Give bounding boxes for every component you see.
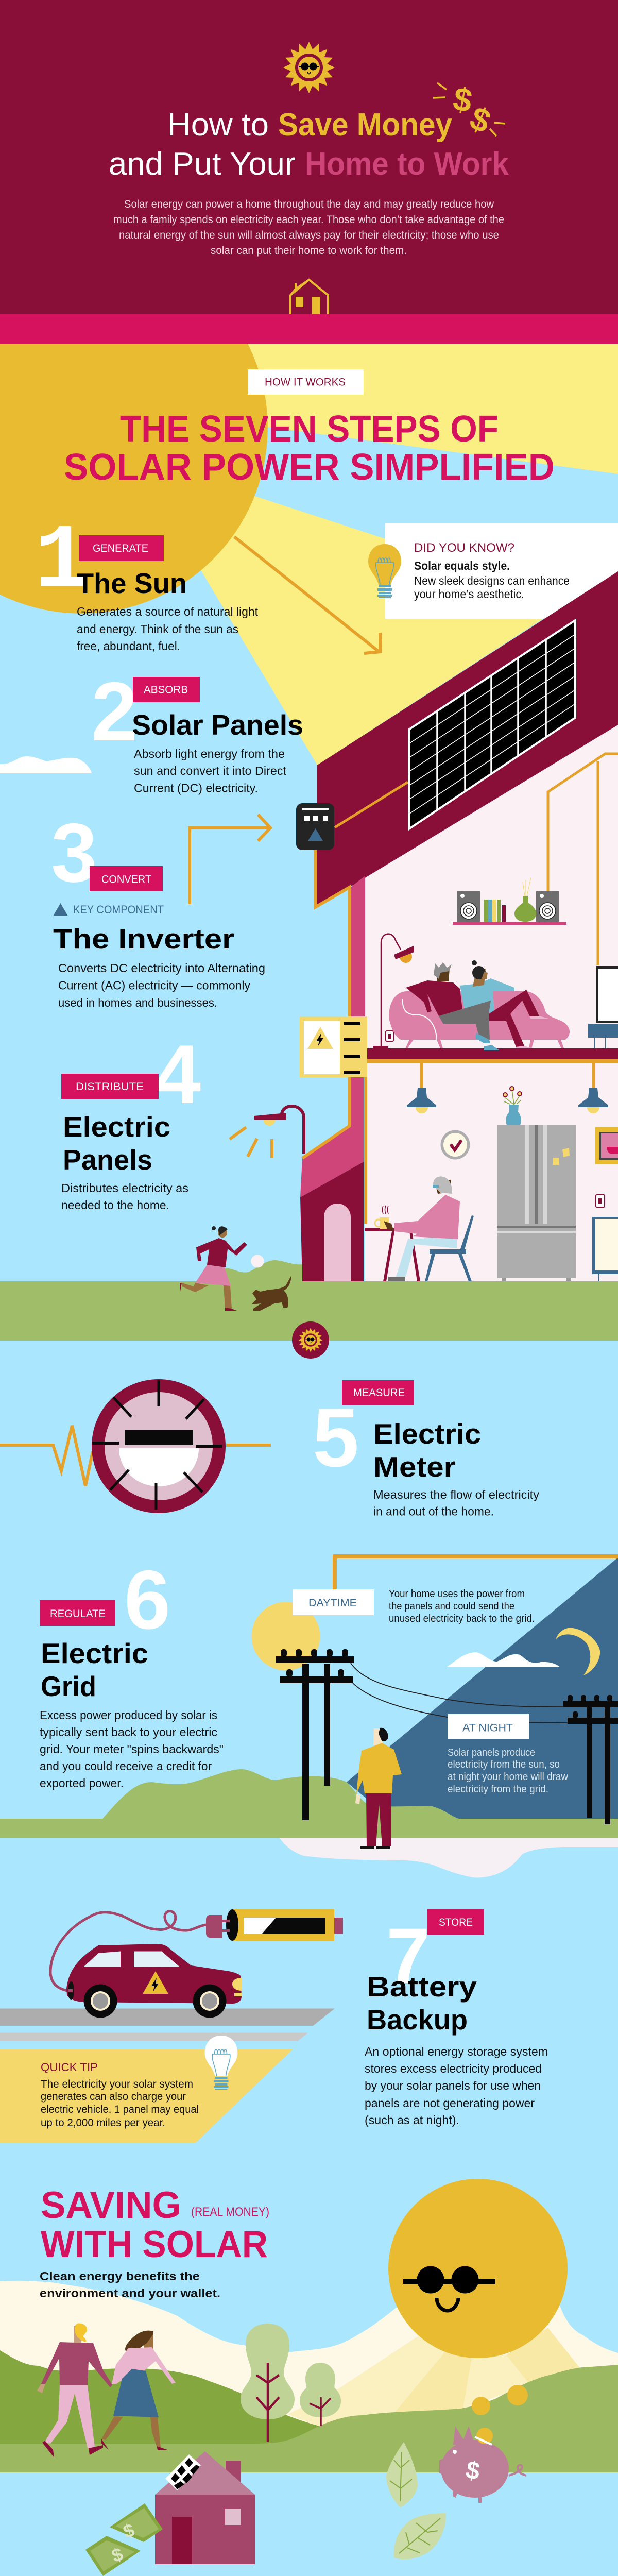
subtitle: Clean energy benefits the (40, 2269, 200, 2283)
background: sun rays (196, 344, 618, 765)
sticker: convert: CONVERT (101, 874, 151, 885)
tip text: The electricity your solar system (41, 2078, 193, 2090)
sticker: regulate (40, 1600, 115, 1626)
wire: daytime orange (335, 1556, 618, 1589)
icon: white bulb (205, 2036, 238, 2090)
number 1: 1 (35, 511, 90, 614)
tip text: up to 2,000 miles per year. (41, 2117, 165, 2129)
house: lower wall shape (300, 1077, 367, 1282)
callout text: your home’s aesthetic. (414, 587, 524, 601)
sofa (389, 991, 570, 1048)
house: side wall column (351, 876, 365, 1018)
tip text: electric vehicle. 1 panel may equal (41, 2104, 199, 2115)
body text (365, 2045, 548, 2127)
number 6: 6 (124, 1553, 170, 1647)
title (41, 2184, 269, 2265)
number 2: 2 (91, 665, 138, 758)
body text: Measures the flow of electricity (373, 1488, 540, 1501)
icon: dollar bills near house (85, 2503, 163, 2576)
panel: step 2 solar panels (91, 665, 303, 794)
icon: electric panel (300, 1016, 367, 1077)
icon: electric meter (0, 1379, 271, 1513)
callout: daytime: the panels and could send the (389, 1601, 514, 1612)
road (0, 2008, 335, 2041)
panel: step 5 electric meter (313, 1380, 540, 1518)
trees (241, 2324, 341, 2442)
floor (367, 1048, 618, 1063)
woman on sofa (460, 960, 548, 1048)
heading: Electric (41, 1637, 148, 1669)
desk with screen (592, 1217, 618, 1281)
vase with flowers (503, 1087, 522, 1125)
sticker: store: STORE (439, 1917, 473, 1928)
big sun (0, 344, 268, 614)
icon: smiling sun (283, 42, 335, 93)
sticker: absorb: ABSORB (144, 684, 188, 696)
callout: daytime: unused electricity back to the grid. (389, 1613, 535, 1624)
heading: Backup (367, 2004, 468, 2036)
house: wall (365, 725, 618, 1282)
utility poles with wires (276, 1649, 618, 1824)
body text (40, 1708, 224, 1790)
woman (101, 2331, 176, 2450)
body text: typically sent back to your electric (40, 1725, 217, 1739)
ball (251, 1255, 264, 1267)
callout: at night: AT NIGHT (462, 1722, 513, 1734)
body text: Excess power produced by solar is (40, 1708, 217, 1722)
icon: leaves (386, 2442, 446, 2559)
body text: by your solar panels for use when (365, 2079, 541, 2092)
icon: dollar signs: $ (465, 99, 496, 140)
number 4: 4 (154, 1028, 201, 1121)
chair (425, 1215, 474, 1281)
title: How to (167, 107, 269, 143)
seated woman with table (365, 1176, 474, 1281)
man on sofa (406, 962, 500, 1050)
intro text (113, 198, 504, 257)
coins (472, 2385, 528, 2415)
subtitle: environment and your wallet. (40, 2286, 220, 2300)
heading (367, 1971, 477, 2036)
solar panels array (409, 620, 575, 829)
icon: piggy bank (439, 2426, 526, 2503)
callout text: Solar equals style. (414, 559, 510, 572)
tip text (41, 2061, 199, 2129)
grass band (0, 1260, 618, 1341)
body text: An optional energy storage system (365, 2045, 548, 2058)
body text (58, 961, 265, 1009)
callout text: New sleek designs can enhance (414, 574, 570, 587)
icon: dollar signs (433, 80, 505, 140)
panel: step 1 the sun (35, 511, 259, 653)
body text: Current (AC) electricity — commonly (58, 979, 250, 992)
outdoor lamp (230, 1106, 304, 1158)
panel: saving heading (40, 2184, 269, 2300)
floor lamp (373, 934, 414, 1048)
callout: at night: Solar panels produce (448, 1747, 535, 1758)
intro text: solar can put their home to work for them. (211, 245, 407, 257)
body text (134, 747, 287, 794)
callout text: DID YOU KNOW? (414, 541, 514, 555)
body text (373, 1488, 540, 1518)
heading (63, 1111, 170, 1176)
callout: at night: at night your home will draw (448, 1771, 569, 1783)
title: Save Money (278, 107, 452, 143)
panel: header (0, 0, 618, 314)
icon: house (290, 280, 328, 314)
heading: Meter (373, 1451, 456, 1483)
body text: needed to the home. (61, 1198, 169, 1212)
TV with stand (588, 966, 618, 1048)
panel: step 6 electric grid (40, 1553, 224, 1790)
heading (373, 1418, 481, 1483)
body text: and energy. Think of the sun as (77, 622, 238, 636)
icon: yellow bulb (368, 544, 401, 598)
body text: exported power. (40, 1776, 124, 1790)
callout: daytime: Your home uses the power from (389, 1588, 525, 1600)
panel: step 7 battery backup (365, 1909, 548, 2127)
picture frame (595, 1127, 618, 1164)
sticker: absorb (133, 677, 200, 702)
body text: sun and convert it into Direct (134, 764, 287, 777)
wires: orange wiring (315, 754, 618, 1018)
people on sofa (406, 960, 548, 1050)
heading: seven steps: THE SEVEN STEPS OF (120, 409, 499, 450)
callout: daytime (293, 1588, 535, 1624)
body text: used in homes and businesses. (58, 996, 217, 1009)
number 5: 5 (313, 1391, 359, 1484)
fridge (497, 1125, 576, 1281)
tip text: QUICK TIP (41, 2061, 98, 2074)
body text: Absorb light energy from the (134, 747, 285, 760)
body text: Converts DC electricity into Alternating (58, 961, 265, 975)
title: and Put Your (109, 146, 296, 182)
heading: The Inverter (53, 923, 234, 955)
title: Home to Work (305, 146, 509, 182)
icon: dollar bills near house: $ (121, 2519, 137, 2543)
intro text: Solar energy can power a home throughout the day and may greatly reduce how (124, 198, 494, 210)
intro text: much a family spends on electricity each year. Those who don’t take advantage of the (113, 214, 504, 226)
saving scene: landscape (0, 2281, 618, 2472)
body text (77, 605, 259, 653)
number 7: 7 (386, 1912, 430, 2000)
body text: panels are not generating power (365, 2096, 535, 2110)
arrow: sun to panels (234, 537, 381, 653)
running child (180, 1226, 247, 1311)
body text (61, 1181, 188, 1212)
title: (REAL MONEY) (191, 2205, 269, 2219)
heading: Grid (41, 1670, 96, 1702)
icon: inverter (296, 803, 334, 850)
outlet (386, 1031, 393, 1041)
sticker: how it works: HOW IT WORKS (265, 376, 346, 388)
house: roof (317, 571, 618, 907)
body text: Generates a source of natural light (77, 605, 259, 618)
sticker: generate (79, 535, 164, 561)
panel: did you know (368, 523, 618, 619)
cloud (447, 1652, 560, 1667)
badge: sun (292, 1321, 329, 1359)
icon: battery with plug (206, 1909, 343, 1941)
cloud (0, 756, 92, 773)
callout: at night: electricity from the sun, so (448, 1759, 560, 1770)
callout: daytime: DAYTIME (308, 1597, 357, 1609)
path: light road (280, 1838, 618, 1877)
sticker: measure (342, 1380, 414, 1405)
callout text (414, 541, 570, 601)
body text: in and out of the home. (373, 1504, 494, 1518)
heading (41, 1637, 148, 1702)
sticker: measure: MEASURE (353, 1387, 405, 1399)
key component: KEY COMPONENT (73, 903, 164, 916)
title: WITH SOLAR (41, 2224, 268, 2265)
body text: and you could receive a credit for (40, 1759, 212, 1773)
sticker: convert (90, 866, 163, 891)
tip text: generates can also charge your (41, 2091, 186, 2103)
sticker: how it works (248, 369, 364, 395)
icon: electric car (50, 1911, 242, 2018)
dog (251, 1275, 291, 1311)
heading: Electric (373, 1418, 481, 1450)
night sky (347, 1557, 618, 1819)
callout: at night: electricity from the grid. (448, 1784, 548, 1795)
number 3: 3 (51, 806, 97, 900)
man looking up (355, 1728, 402, 1849)
body text: (such as at night). (365, 2113, 459, 2127)
grass hills (0, 1769, 618, 1838)
panel: step 3 the inverter (51, 806, 265, 1009)
subtitle (40, 2269, 220, 2300)
sticker: store (427, 1909, 484, 1935)
band: pink divider (0, 314, 618, 344)
sticker: regulate: REGULATE (50, 1608, 106, 1620)
body text: Distributes electricity as (61, 1181, 188, 1195)
outlet (596, 1195, 605, 1207)
intro text: natural energy of the sun will almost always pay for their electricity; those who use (119, 229, 499, 241)
icon: house with panels (155, 2451, 255, 2564)
panel: quick tip (0, 2036, 293, 2143)
body text: free, abundant, fuel. (77, 639, 180, 653)
arrow: to inverter (190, 815, 270, 904)
moon (556, 1628, 600, 1675)
heading: seven steps: SOLAR POWER SIMPLIFIED (64, 447, 555, 488)
shelf with speakers, books and vase (453, 877, 566, 925)
pendant lamps (407, 1063, 608, 1113)
heading: Panels (63, 1144, 152, 1176)
heading: Solar Panels (132, 709, 303, 741)
sticker: generate: GENERATE (93, 543, 148, 554)
sticker: distribute (61, 1074, 159, 1099)
title (109, 107, 509, 182)
heading: The Sun (77, 567, 187, 599)
icon: dollar signs: $ (451, 80, 475, 120)
icon: piggy bank: $ (464, 2456, 482, 2485)
body text: grid. Your meter "spins backwards" (40, 1742, 224, 1756)
icon: dollar bills near house: $ (109, 2543, 126, 2567)
wall clock (441, 1130, 470, 1159)
panel: step 4 electric panels (61, 1028, 201, 1212)
body text: Current (DC) electricity. (134, 781, 258, 794)
heading: Electric (63, 1111, 170, 1143)
callout: at night (448, 1714, 569, 1795)
sticker: distribute: DISTRIBUTE (76, 1081, 144, 1093)
couple walking (37, 2323, 176, 2458)
body text: stores excess electricity produced (365, 2062, 542, 2075)
heading: seven steps (64, 409, 555, 488)
heading: Battery (367, 1971, 477, 2003)
title: SAVING (41, 2184, 181, 2226)
man (37, 2323, 112, 2458)
big sun with face (388, 2179, 568, 2358)
table (365, 1228, 422, 1281)
daytime sun (251, 1602, 320, 1670)
